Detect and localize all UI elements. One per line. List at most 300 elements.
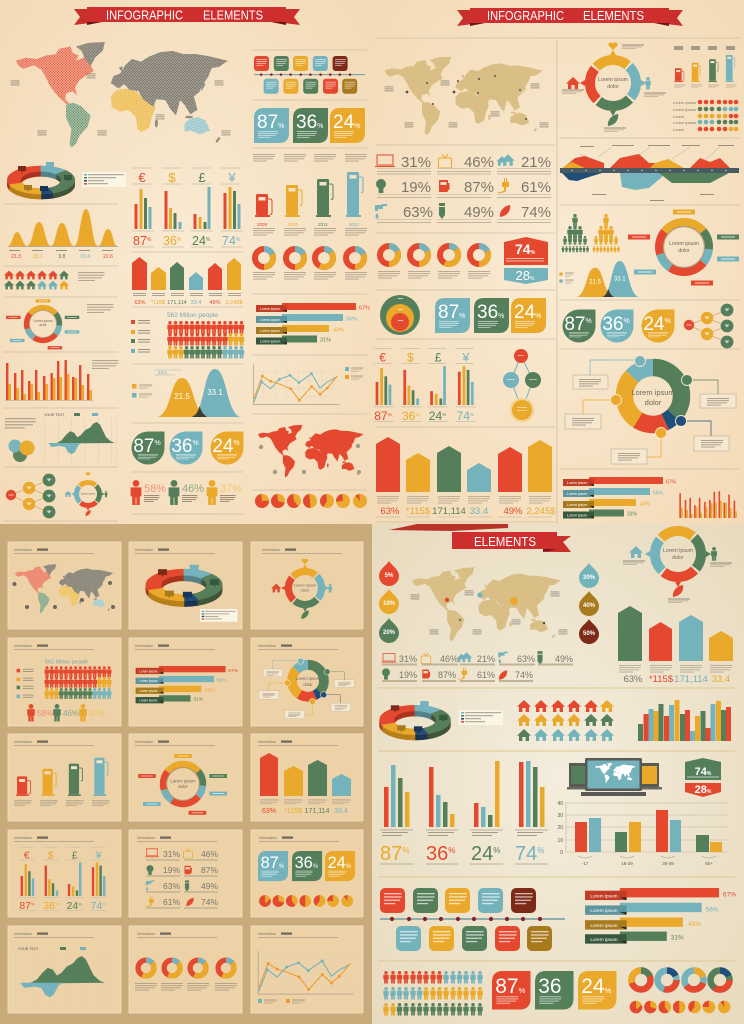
- pie row: [255, 494, 367, 508]
- area chart: [5, 413, 117, 462]
- mountain chart: 10.4: [80, 254, 90, 260]
- card headings: Information: [14, 548, 32, 552]
- currency card: 87: [19, 901, 31, 912]
- currency bar charts: %: [388, 412, 392, 417]
- arrow bars card: 63%: [262, 808, 276, 815]
- house icons: [4, 271, 104, 289]
- age column chart: [557, 801, 728, 866]
- currency bars: 36: [426, 843, 448, 865]
- segmented ring: [628, 210, 739, 286]
- tan world map: [385, 57, 543, 135]
- title banner: [74, 7, 300, 25]
- large donut with callouts: Lorem ipsum: [631, 388, 675, 397]
- progress bars card: 43%: [205, 688, 215, 694]
- progress bars card: Lorem ipsum: [139, 689, 158, 693]
- percent drops: 87: [564, 314, 585, 335]
- percent drops: %: [192, 440, 199, 447]
- icon stats: 19%: [399, 670, 417, 680]
- small ring: Lorem ipsum: [81, 492, 95, 496]
- currency card: 24: [67, 901, 78, 912]
- progress bars: [256, 303, 370, 344]
- leaf percent boxes: [492, 971, 616, 1010]
- donut legend: [82, 172, 126, 187]
- mountain timeline: [560, 145, 739, 201]
- map markers and labels: [410, 590, 568, 634]
- percent drops: 24: [643, 314, 664, 335]
- arrow bars: [132, 257, 242, 306]
- left teardrops: [379, 561, 399, 643]
- fuel pumps: 2010: [288, 222, 299, 227]
- progress bars: 43%: [333, 328, 344, 334]
- icon list card: 31%: [163, 849, 180, 859]
- small bell curves: 33.1: [614, 277, 626, 283]
- currency bars: %: [537, 846, 544, 855]
- arrow bars card: *115$: [284, 808, 302, 815]
- 3D donut: [14, 162, 72, 196]
- people pyramids: [562, 214, 620, 252]
- map markers: [259, 444, 361, 474]
- title banner: ELEMENTS: [203, 8, 263, 22]
- leaf percent boxes: [254, 108, 365, 143]
- big donut card: dolor: [303, 682, 313, 687]
- card headings: Information: [262, 548, 280, 552]
- arrow bars: 63%: [134, 300, 146, 306]
- icon stat list: 61%: [521, 179, 551, 196]
- four segment ring: dolor: [672, 555, 684, 561]
- people percentages: 37%: [220, 483, 242, 495]
- arrow bars: 171,114: [674, 674, 708, 685]
- ring card 2: Lorem ipsum: [170, 778, 196, 783]
- arrow bars: 33.4: [712, 674, 730, 685]
- progress bars card: Lorem ipsum: [139, 679, 158, 683]
- age column chart: 40: [557, 801, 563, 807]
- card headings: Information: [258, 932, 276, 936]
- nested circles: [380, 295, 420, 335]
- arrow bars: 63%: [623, 674, 643, 685]
- percent drops: %: [623, 318, 630, 325]
- 74 and 28 percent badges: 74%: [515, 241, 536, 257]
- 74 and 28 percent badges: [685, 758, 721, 797]
- panel: top-right infographic: [373, 8, 740, 524]
- icon stat list: [375, 154, 551, 223]
- four segment ring: dolor: [607, 84, 619, 90]
- small bell curves: [577, 261, 638, 297]
- progress bars: 67%: [359, 306, 370, 312]
- age column chart: 0: [560, 850, 563, 856]
- progress bars: Lorem ipsum: [590, 923, 618, 928]
- map dots and labels: [384, 75, 548, 127]
- currency bar charts: %: [470, 412, 474, 417]
- age column chart: 50+: [705, 861, 713, 866]
- donut legend: [459, 710, 503, 725]
- pie row: [630, 1001, 730, 1013]
- currency bar charts: £: [198, 170, 206, 185]
- currency bar charts: 87: [374, 409, 388, 423]
- progress bars: 56%: [653, 490, 664, 496]
- ring captions: [562, 44, 666, 132]
- card headings: Information: [259, 836, 277, 840]
- currency bar charts: €: [138, 170, 146, 185]
- arrow bars: 33.4: [470, 506, 488, 517]
- people card: 562 Milion people: [45, 660, 88, 666]
- ring card 2: dolor: [178, 784, 188, 789]
- percent drops: 36: [171, 436, 192, 457]
- progress bars: 67%: [666, 480, 677, 486]
- icon stats: 61%: [477, 670, 495, 680]
- card headings: Information: [258, 644, 276, 648]
- currency bars: 74: [515, 843, 537, 865]
- house grid: [517, 700, 614, 741]
- icon stat list: 74%: [521, 204, 551, 221]
- progress bars: Lorem ipsum: [260, 340, 280, 344]
- ribbon banner: [389, 524, 571, 552]
- dotted world map: [16, 42, 228, 147]
- card headings: Information: [135, 644, 153, 648]
- icon list card: 63%: [163, 881, 180, 891]
- icon stat list: 87%: [464, 179, 494, 196]
- panel: top-left background: [0, 0, 372, 524]
- currency bar charts: 74: [457, 409, 470, 423]
- red world map: [258, 425, 363, 477]
- currency bar charts: ¥: [461, 351, 469, 365]
- ring card: Lorem ipsum: [294, 583, 317, 588]
- icon stats: 87%: [438, 670, 456, 680]
- leaf percent boxes: 87%: [495, 975, 526, 998]
- mountain chart: [8, 209, 118, 260]
- progress bars: Lorem ipsum: [567, 503, 587, 507]
- currency bar charts: %: [236, 237, 241, 243]
- red and yellow bars: [679, 491, 737, 518]
- percent drops: %: [233, 440, 240, 447]
- map labels: [10, 73, 230, 135]
- arrow bars: 49%: [503, 506, 523, 517]
- four segment ring: [566, 42, 651, 126]
- pumps card: [14, 758, 110, 806]
- ring note: [87, 304, 113, 313]
- arrow bars: [376, 437, 556, 517]
- currency bar charts: [132, 168, 243, 248]
- left teardrops: 5%: [385, 573, 394, 579]
- arrow bars: 2,243$: [226, 300, 242, 306]
- currency bar charts: €: [379, 351, 386, 365]
- currency bar charts: 74: [222, 234, 236, 248]
- bell curves: 23.5: [158, 370, 167, 375]
- percent drops: 87: [133, 436, 154, 457]
- mountain chart: 21.3: [11, 254, 21, 260]
- card headings: Information: [14, 836, 32, 840]
- arrow bars: 2,245$: [526, 506, 556, 517]
- currency bar charts: %: [206, 237, 211, 243]
- panel: card grid: [8, 542, 363, 1013]
- icon list card: 61%: [163, 897, 180, 907]
- card headings: Information: [14, 644, 32, 648]
- leaf percent boxes: 87%: [438, 302, 465, 323]
- icon list card: [145, 848, 218, 908]
- arrow bars card: [260, 753, 351, 815]
- arrow bars: [618, 606, 733, 685]
- age column chart: 18-29: [621, 861, 633, 866]
- segmented ring: [6, 299, 79, 349]
- currency bars: [380, 761, 548, 865]
- currency card: 36: [43, 901, 55, 912]
- timeline: [254, 56, 365, 94]
- 3D donut card: [153, 565, 237, 622]
- progress bars: Lorem ipsum: [590, 893, 618, 898]
- percent drops: %: [664, 318, 671, 325]
- area chart: YOUR TEXT: [44, 413, 65, 417]
- leaf percent boxes: 24%: [581, 975, 612, 998]
- icon stats: 49%: [555, 654, 573, 664]
- currency bar charts: %: [147, 237, 152, 243]
- leaf percent boxes: 87%: [257, 112, 284, 133]
- percent drops: 36: [602, 314, 623, 335]
- ring card 2: [138, 754, 227, 815]
- currency card: €: [24, 850, 30, 861]
- progress bars: 67%: [723, 892, 736, 899]
- right teardrops: 30%: [583, 575, 596, 581]
- large donut with callouts: dolor: [645, 398, 662, 407]
- card headings: Information: [14, 740, 32, 744]
- currency bars: 24: [471, 843, 493, 865]
- panel: bottom-right background: [372, 524, 744, 1024]
- people card: 37%: [89, 709, 105, 718]
- icon list card: 49%: [201, 881, 218, 891]
- arrow bars: *115$: [649, 674, 674, 685]
- laptop with tablets: [567, 758, 662, 796]
- currency bar charts: 87: [133, 234, 147, 248]
- 74 and 28 percent badges: 74%: [695, 766, 712, 778]
- segmented ring: Lorem ipsum: [669, 241, 699, 247]
- icon stats: 31%: [399, 654, 417, 664]
- progress bars card: 56%: [217, 678, 227, 684]
- area chart card: [16, 947, 107, 1007]
- card headings: Information: [137, 932, 155, 936]
- progress bars card: 31%: [193, 697, 204, 703]
- currency bar charts: $: [407, 351, 414, 365]
- title banner: INFOGRAPHIC: [106, 8, 183, 22]
- leaf boxes card: 36%: [295, 854, 319, 872]
- progress bars card: 67%: [228, 668, 239, 674]
- arrow bars: *115$: [406, 506, 431, 517]
- currency bars: %: [448, 846, 455, 855]
- icon list card: 74%: [201, 897, 218, 907]
- progress bars: Lorem ipsum: [590, 937, 618, 942]
- dot matrix: Lorem: [673, 127, 685, 132]
- four segment ring: [629, 521, 717, 597]
- people percentages: 46%: [182, 483, 204, 495]
- currency card: %: [78, 902, 82, 907]
- area chart card: YOUR TEXT: [18, 947, 39, 951]
- progress bars card: [136, 666, 239, 703]
- dot matrix: Lorem ipsum: [673, 107, 697, 112]
- icon stats: 21%: [477, 654, 495, 664]
- dot matrix: Lorem ipsum: [673, 100, 697, 105]
- leaf percent boxes: 24%: [514, 302, 541, 323]
- age column chart: 10: [557, 838, 563, 844]
- progress bars card: Lorem ipsum: [139, 699, 158, 703]
- panel: top-right background: [372, 0, 744, 524]
- percent drops: [132, 432, 244, 464]
- arrow bars: 171,114: [432, 506, 466, 517]
- currency bar charts: ¥: [227, 170, 236, 185]
- progress bars: Lorem ipsum: [260, 329, 280, 333]
- card headings: Information: [135, 548, 153, 552]
- panel: bottom-right infographic: [378, 521, 736, 1016]
- small fuel pumps: [674, 46, 737, 88]
- donut row: [253, 249, 367, 280]
- currency bar charts: %: [442, 412, 446, 417]
- card headings: Information: [258, 740, 276, 744]
- currency bar charts: %: [415, 412, 419, 417]
- currency bars: %: [493, 846, 500, 855]
- age column chart: 30-49: [662, 861, 674, 866]
- segmented ring: dolor: [678, 248, 690, 254]
- currency card: 74: [91, 901, 102, 912]
- line chart: [253, 364, 363, 405]
- mountain chart: 22.6: [103, 254, 113, 260]
- age column chart: 20: [557, 825, 563, 831]
- currency bar charts: 24: [192, 234, 206, 248]
- leaf percent boxes: 36%: [296, 112, 323, 133]
- donut row: [378, 246, 490, 278]
- 74 and 28 percent badges: 28%: [516, 268, 535, 283]
- panel: top-left infographic: [4, 7, 370, 521]
- dotted map card: [12, 564, 115, 613]
- progress bars: 43%: [640, 502, 651, 508]
- arrow bars card: 171,114: [305, 808, 329, 815]
- percent drops: [562, 310, 674, 342]
- currency bar charts: 36: [402, 409, 415, 423]
- progress bars: 31%: [671, 935, 684, 942]
- progress bars: 31%: [320, 338, 331, 344]
- left teardrops: 20%: [383, 630, 396, 636]
- currency bar charts: %: [177, 237, 182, 243]
- fuel pumps: 2012: [349, 222, 360, 227]
- timeline: [380, 888, 565, 951]
- people card: 46%: [63, 709, 79, 718]
- icon stats: 46%: [440, 654, 458, 664]
- big donut card: [259, 658, 354, 719]
- people rows: [383, 971, 483, 1016]
- icon stats: 74%: [515, 670, 533, 680]
- line chart card: [258, 951, 353, 1004]
- progress bars: Lorem ipsum: [567, 481, 587, 485]
- tricolor donuts: [632, 970, 730, 990]
- arrow bars: 171,114: [167, 300, 187, 306]
- right teardrops: [579, 563, 599, 644]
- title banner: INFOGRAPHIC: [487, 8, 564, 23]
- currency bar charts: [373, 349, 476, 423]
- small bell curves: 21.5: [589, 280, 601, 286]
- icon list card: 19%: [163, 865, 180, 875]
- card headings: Information: [135, 740, 153, 744]
- ring card: dolor: [301, 588, 310, 593]
- age column chart: 30: [557, 813, 563, 819]
- progress bars: 56%: [706, 906, 719, 913]
- progress bars: [563, 477, 677, 518]
- leaf boxes card: 24%: [328, 854, 352, 872]
- people percentages: 58%: [144, 483, 166, 495]
- leaf percent boxes: 36: [538, 975, 562, 998]
- card headings: Information: [14, 932, 32, 936]
- segmented ring: Lorem ipsum: [33, 319, 53, 323]
- flow circles: [503, 349, 541, 422]
- progress bars: Lorem ipsum: [260, 318, 280, 322]
- people card: [17, 660, 111, 722]
- fuel pumps: 2011: [318, 222, 328, 227]
- tan world map: [412, 567, 561, 641]
- progress bars: [585, 888, 736, 944]
- currency card: $: [48, 850, 54, 861]
- currency card: [19, 847, 107, 912]
- leaf boxes card: 87%: [261, 854, 285, 872]
- fuel pumps: 2009: [257, 222, 268, 227]
- icon stats: [382, 651, 573, 681]
- ribbon banner: ELEMENTS: [474, 534, 536, 549]
- percent drops: %: [154, 440, 161, 447]
- title banner: ELEMENTS: [583, 8, 644, 23]
- panel: bottom-left background: [0, 524, 372, 1024]
- arrow bars: *115$: [151, 300, 165, 306]
- progress bars: 56%: [346, 316, 357, 322]
- node tree: [6, 474, 55, 518]
- icon stat list: 46%: [464, 154, 494, 171]
- venn circles: [8, 440, 34, 462]
- currency card: ¥: [95, 850, 102, 861]
- bell curves: 21.5: [174, 392, 190, 401]
- dot matrix: Lorem ipsum: [673, 120, 697, 125]
- mountain chart: 15.1: [33, 254, 43, 260]
- arrow bars: 49%: [209, 300, 221, 306]
- leaf percent boxes: 24%: [333, 112, 360, 133]
- node tree: [684, 304, 733, 348]
- progress bars: 31%: [627, 512, 638, 518]
- small ring: [64, 472, 107, 516]
- people card: 58%: [37, 709, 53, 718]
- four segment ring: Lorem ipsum: [663, 548, 693, 554]
- four segment ring: Lorem ipsum: [598, 77, 628, 83]
- icon stat list: 19%: [401, 179, 431, 196]
- bell curves: 33.1: [207, 388, 223, 397]
- pie row card: [259, 895, 353, 907]
- progress bars: Lorem ipsum: [260, 307, 280, 311]
- leaf percent boxes: 36%: [477, 302, 504, 323]
- ring card: [271, 559, 332, 619]
- bell legend: [559, 272, 574, 284]
- arrow bars card: 33.4: [334, 808, 348, 815]
- big donut card: Lorem ipsum: [296, 676, 321, 681]
- currency bars: %: [402, 846, 409, 855]
- progress bars: Lorem ipsum: [567, 514, 587, 518]
- icon list card: 87%: [201, 865, 218, 875]
- dot matrix: Lorem: [673, 114, 685, 119]
- icon list card: 46%: [201, 849, 218, 859]
- colored column chart: [638, 700, 731, 741]
- title banner: [457, 8, 683, 26]
- currency bar charts: $: [168, 170, 176, 185]
- leaf percent boxes: [435, 298, 546, 333]
- progress bars: 43%: [688, 921, 701, 928]
- right teardrops: 50%: [583, 631, 596, 637]
- left teardrops: 10%: [383, 601, 396, 607]
- fuel pumps: [253, 154, 367, 236]
- currency bar charts: 24: [429, 409, 442, 423]
- icon stat list: 63%: [403, 204, 433, 221]
- currency bars: 87: [380, 843, 402, 865]
- 74 and 28 percent badges: 28%: [695, 784, 712, 796]
- laptop map: [595, 763, 636, 783]
- arrow bars: 33.4: [191, 300, 201, 306]
